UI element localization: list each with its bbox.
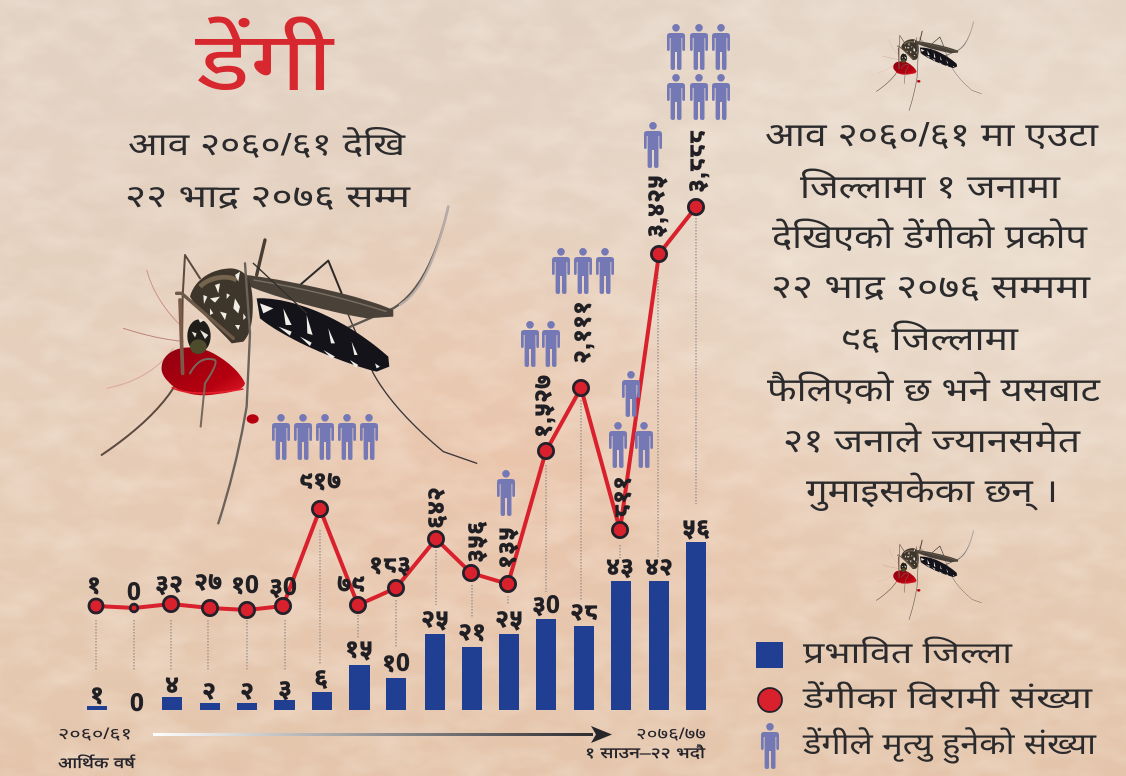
legend <box>756 636 1097 769</box>
bar value labels: २ <box>202 677 216 705</box>
icons: dengue deaths <box>272 24 730 516</box>
line value labels: ८११ <box>608 476 636 518</box>
line value labels: १८३ <box>369 551 411 579</box>
text block: summary: गुमाइसकेका छन् । <box>806 471 1058 511</box>
bar value labels: १0 <box>382 649 410 677</box>
line value labels: २,१११ <box>568 301 596 364</box>
axis label: start: २०६०/६१ <box>58 726 132 743</box>
illustration: small mosquito top <box>876 22 981 111</box>
bar value labels: ४३ <box>606 553 634 581</box>
line value labels: 0 <box>127 578 141 606</box>
subtitle: आव २०६०/६१ देखि <box>128 127 406 162</box>
bar value labels: 0 <box>130 689 144 717</box>
illustration: large mosquito <box>102 207 477 523</box>
legend: डेंगीले मृत्यु हुनेको संख्या <box>802 726 1097 764</box>
text block: summary: देखिएको डेंगीको प्रकोप <box>772 217 1088 255</box>
line value labels: १३५ <box>493 527 521 569</box>
line value labels <box>87 130 711 606</box>
text block: summary: जिल्लामा १ जनामा <box>800 168 1062 205</box>
line value labels: ३२ <box>155 570 183 598</box>
bar value labels: ५६ <box>682 514 710 542</box>
text block: summary: २२ भाद्र २०७६ सम्ममा <box>771 268 1092 305</box>
bar value labels: १५ <box>345 635 373 663</box>
legend: डेंगीका विरामी संख्या <box>802 681 1094 715</box>
text block: summary: ९६ जिल्लामा <box>840 320 1020 357</box>
bar value labels: २५ <box>421 605 449 633</box>
line value labels: २७ <box>194 568 222 596</box>
line value labels: ३0 <box>269 573 297 601</box>
bar value labels: ३ <box>278 675 292 703</box>
bar value labels: ४ <box>165 671 179 699</box>
subtitle: २२ भाद्र २०७६ सम्म <box>125 179 411 214</box>
line value labels: १ <box>87 571 101 599</box>
text block: summary: २१ जनाले ज्यानसमेत <box>783 421 1081 459</box>
title: डेंगी <box>195 16 335 108</box>
line chart: dengue patients <box>89 199 704 618</box>
axis label: start: आर्थिक वर्ष <box>58 754 136 772</box>
line value labels: ३,८८८ <box>683 130 711 193</box>
bar value labels: ६ <box>314 664 328 692</box>
bar value labels: २५ <box>495 605 523 633</box>
chart: dotted guide lines <box>96 215 696 671</box>
bar value labels: ३0 <box>532 591 560 619</box>
line value labels: ७९ <box>337 570 365 598</box>
axis label: start <box>58 726 136 772</box>
text block: summary <box>765 116 1102 511</box>
bar value labels: २ <box>240 677 254 705</box>
line value labels: ९१७ <box>299 467 341 495</box>
legend: प्रभावित जिल्ला <box>803 636 1014 670</box>
axis label: end: १ साउन–२२ भदौ <box>585 745 706 762</box>
bar value labels <box>90 514 710 717</box>
bar value labels: २८ <box>570 598 598 626</box>
line value labels: १0 <box>231 571 259 599</box>
line value labels: ३,४२५ <box>642 175 670 238</box>
bar chart: affected districts <box>87 542 706 710</box>
axis label: end: २०७६/७७ <box>636 726 706 743</box>
line value labels: ६४२ <box>422 487 450 529</box>
bar value labels: १ <box>90 681 104 709</box>
text block: summary: आव २०६०/६१ मा एउटा <box>765 116 1100 153</box>
arrow: timeline <box>153 726 612 743</box>
text block: summary: फैलिएको छ भने यसबाट <box>767 370 1102 408</box>
bar value labels: ४२ <box>645 553 673 581</box>
line value labels: १,५२७ <box>529 375 557 438</box>
axis label: end <box>585 726 706 762</box>
line value labels: ३५६ <box>462 521 490 563</box>
subtitle <box>125 127 411 214</box>
bar value labels: २१ <box>458 618 486 646</box>
illustration: small mosquito bottom <box>876 531 981 620</box>
